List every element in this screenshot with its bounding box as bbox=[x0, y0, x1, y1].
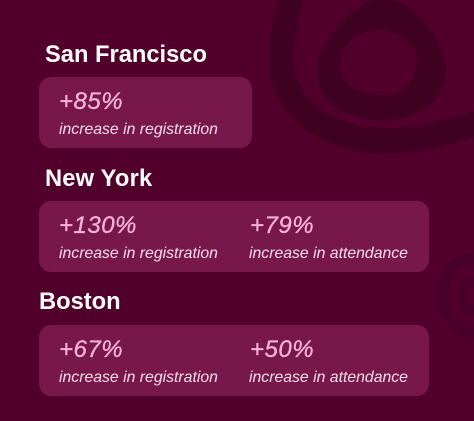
heading: New York: New York bbox=[45, 166, 152, 192]
stat: +79%: +79% bbox=[250, 212, 314, 239]
label: increase in registration: increase in registration bbox=[59, 245, 218, 262]
panel: Boston stats bbox=[39, 325, 429, 396]
stat: +85%: +85% bbox=[59, 88, 123, 115]
heading: San Francisco: San Francisco bbox=[45, 42, 207, 68]
panel: San Francisco stats bbox=[39, 77, 252, 148]
stat: +50%: +50% bbox=[250, 336, 314, 363]
panel: New York stats bbox=[39, 201, 429, 272]
label: increase in attendance: increase in attendance bbox=[249, 245, 408, 262]
stat: +130%: +130% bbox=[59, 212, 137, 239]
stat: +67%: +67% bbox=[59, 336, 123, 363]
label: increase in attendance: increase in attendance bbox=[249, 369, 408, 386]
label: increase in registration: increase in registration bbox=[59, 121, 218, 138]
heading: Boston: Boston bbox=[39, 289, 121, 315]
label: increase in registration: increase in registration bbox=[59, 369, 218, 386]
